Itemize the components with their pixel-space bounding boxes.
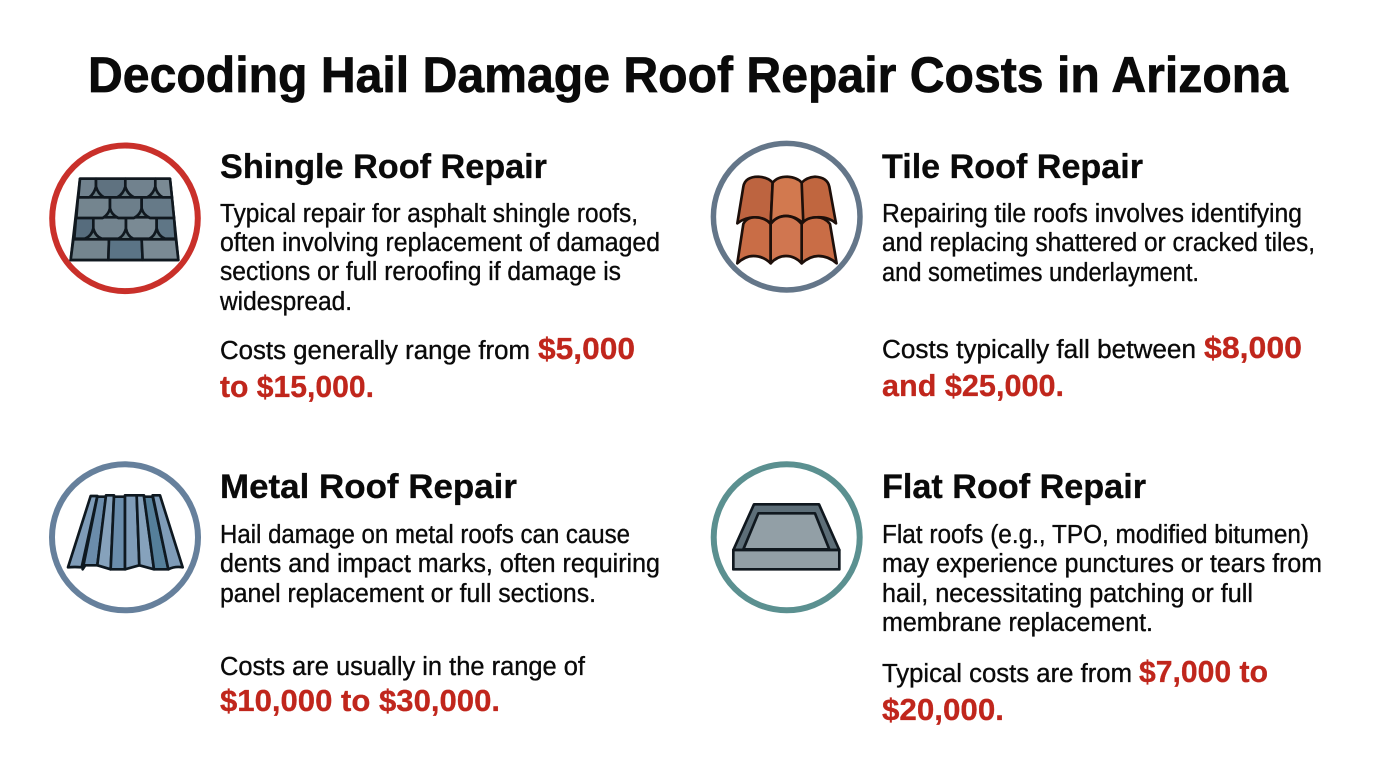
cost range: $7,000 to xyxy=(1139,654,1268,689)
description: Flat roofs (e.g., TPO, modified bitumen) xyxy=(882,521,1309,549)
cost range xyxy=(220,331,635,404)
panel: shingle roof repair xyxy=(52,146,660,404)
description: may experience punctures or tears from xyxy=(882,550,1322,578)
icon: metal roof xyxy=(52,464,198,610)
panel: metal roof repair xyxy=(52,464,660,718)
description: Repairing tile roofs involves identifying xyxy=(882,200,1302,228)
cost range: Costs generally range from xyxy=(220,337,530,365)
description: membrane replacement. xyxy=(882,609,1153,637)
cost range xyxy=(882,330,1302,403)
description: Typical repair for asphalt shingle roofs, xyxy=(220,200,638,228)
icon: flat roof xyxy=(714,464,860,610)
cost range xyxy=(220,653,586,718)
cost range: $5,000 xyxy=(538,331,635,366)
cost range: $8,000 xyxy=(1204,330,1302,365)
description: widespread. xyxy=(219,288,352,316)
panel: flat roof repair xyxy=(714,464,1322,727)
cost range: $10,000 to $30,000. xyxy=(220,683,500,718)
description: and replacing shattered or cracked tiles, xyxy=(882,229,1315,257)
description: panel replacement or full sections. xyxy=(220,580,596,608)
description: dents and impact marks, often requiring xyxy=(220,550,660,578)
description xyxy=(220,521,660,608)
heading: Shingle Roof Repair xyxy=(220,148,547,186)
description xyxy=(219,200,660,316)
heading: Tile Roof Repair xyxy=(882,148,1143,186)
description: sections or full reroofing if damage is xyxy=(220,258,621,286)
cost range: Typical costs are from xyxy=(882,660,1132,688)
heading: Metal Roof Repair xyxy=(220,468,517,506)
description xyxy=(882,200,1315,287)
cost range xyxy=(882,654,1268,727)
description: hail, necessitating patching or full xyxy=(882,580,1253,608)
description: Hail damage on metal roofs can cause xyxy=(220,521,630,549)
title: Decoding Hail Damage Roof Repair Costs in Arizona xyxy=(88,47,1289,103)
description xyxy=(882,521,1322,637)
heading: Flat Roof Repair xyxy=(882,468,1146,506)
description: often involving replacement of damaged xyxy=(220,229,660,257)
cost range: to $15,000. xyxy=(220,369,374,404)
description: and sometimes underlayment. xyxy=(882,259,1199,287)
panel: tile roof repair xyxy=(713,143,1315,403)
icon: shingle roof xyxy=(52,146,198,291)
cost range: and $25,000. xyxy=(882,368,1064,403)
cost range: Costs typically fall between xyxy=(882,336,1196,364)
cost range: $20,000. xyxy=(882,692,1004,727)
cost range: Costs are usually in the range of xyxy=(220,653,586,681)
icon: tile roof xyxy=(713,143,860,290)
